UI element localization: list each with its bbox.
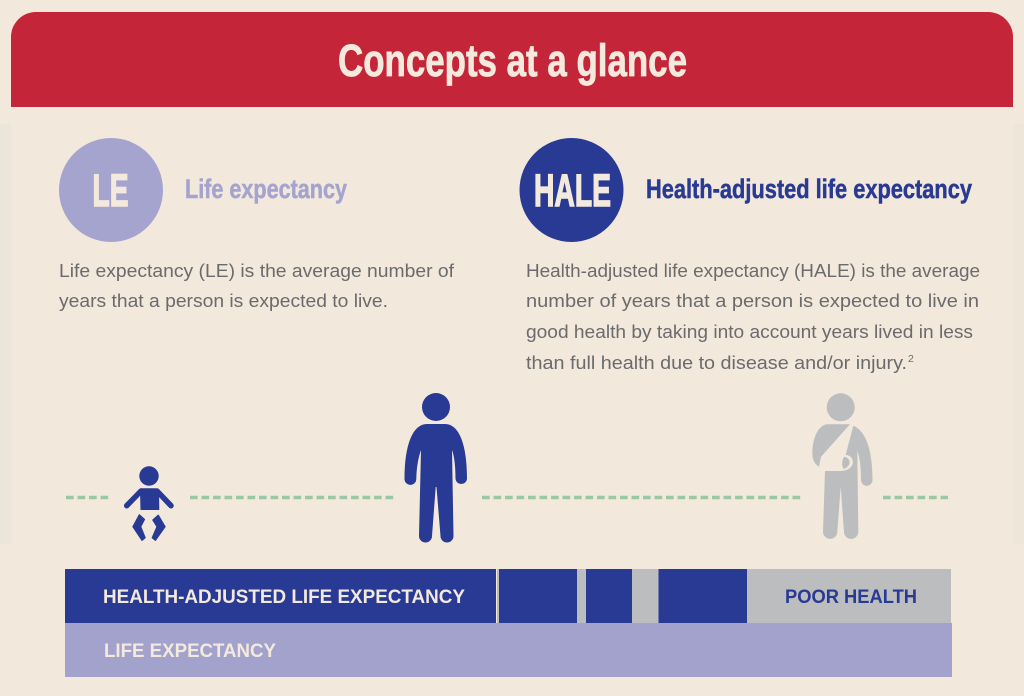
title banner xyxy=(11,12,1013,107)
icon: baby xyxy=(127,466,171,540)
text block: HALE definition: 2 xyxy=(908,353,914,365)
panel: life expectancy xyxy=(59,138,455,311)
panel: health-adjusted life expectancy xyxy=(520,138,980,373)
icon: HALE badge: HALE xyxy=(534,165,611,216)
bar: poor health background xyxy=(497,569,951,623)
text block: HALE definition: number of years that a person is expected to live in xyxy=(526,291,979,311)
text block: life expectancy definition xyxy=(59,261,455,311)
icon: LE badge: LE xyxy=(92,165,128,216)
text block: life expectancy definition: Life expectancy (LE) is the average number of xyxy=(59,261,455,281)
bar: life expectancy xyxy=(65,623,952,677)
text block: HALE definition: Health-adjusted life expectancy (HALE) is the average xyxy=(526,261,980,281)
bar: healthy years xyxy=(65,569,747,623)
text block: HALE definition: than full health due to disease and/or injury. xyxy=(526,353,907,373)
icon: injured adult with sling xyxy=(812,393,872,539)
icon: HALE badge xyxy=(520,138,624,242)
chart: health bar xyxy=(65,569,952,677)
text block: HALE definition: good health by taking into account years lived in less xyxy=(526,322,973,342)
label: life expectancy: LIFE EXPECTANCY xyxy=(104,641,276,662)
timeline dashed line xyxy=(66,496,948,499)
label: health-adjusted life expectancy: HEALTH-ADJUSTED LIFE EXPECTANCY xyxy=(103,587,465,608)
icon: healthy adult xyxy=(404,393,467,542)
label: poor health: POOR HEALTH xyxy=(785,587,917,608)
heading: life expectancy: Life expectancy xyxy=(185,174,347,204)
text block: HALE definition xyxy=(526,261,980,373)
icon: LE badge xyxy=(59,138,163,242)
text block: life expectancy definition: years that a person is expected to live. xyxy=(59,291,388,311)
title: Concepts at a glance xyxy=(338,35,687,86)
